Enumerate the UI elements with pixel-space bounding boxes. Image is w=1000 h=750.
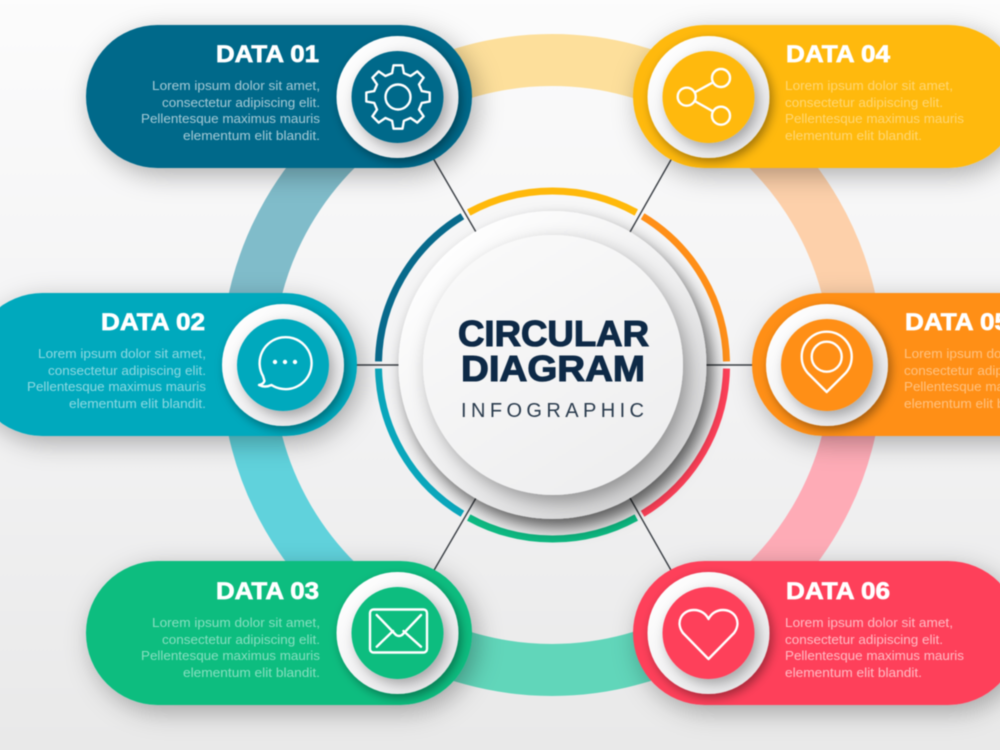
pill	[0, 293, 357, 436]
inner colored arcs	[378, 191, 726, 539]
icon circle	[648, 572, 770, 694]
body text: Lorem ipsum dolor sit amet,	[38, 346, 206, 361]
body text: consectetur adipiscing elit.	[785, 95, 943, 110]
outer disc	[398, 211, 706, 519]
pill	[86, 561, 472, 705]
pill	[752, 293, 1000, 436]
center disc	[398, 211, 706, 519]
icon circle	[648, 36, 770, 158]
panel: data 05	[752, 293, 1000, 436]
body text: elementum elit blandit.	[69, 396, 206, 411]
panel: data 01	[86, 25, 472, 168]
body text: elementum elit blandit.	[785, 665, 922, 680]
heading: DATA 06	[786, 578, 890, 605]
inner disc	[423, 235, 683, 495]
body text: Pellentesque maximus mauris	[785, 111, 965, 126]
heading: DATA 01	[216, 41, 319, 68]
body text: Pellentesque maximus mauris	[141, 648, 321, 663]
title: CIRCULAR	[458, 313, 649, 354]
body text	[904, 346, 1000, 411]
heading: DATA 05	[905, 309, 1000, 336]
icon circle	[336, 36, 458, 158]
arc: orange	[643, 216, 726, 361]
panel: data 03	[86, 561, 472, 705]
arc: red	[643, 369, 726, 514]
body text: elementum elit blandit.	[785, 128, 922, 143]
subtitle: INFOGRAPHIC	[461, 400, 644, 422]
ring segment: upper right	[704, 101, 857, 365]
arc: teal	[378, 369, 462, 514]
icon: share	[678, 69, 730, 125]
body text: consectetur adipiscing elit.	[785, 632, 943, 647]
panel: data 02	[0, 293, 357, 436]
icon: gear	[366, 65, 430, 129]
pill	[633, 561, 1000, 705]
body text: elementum elit blandit.	[183, 128, 320, 143]
heading: DATA 04	[786, 41, 891, 68]
body text: Lorem ipsum dolor sit amet,	[785, 78, 953, 93]
body text: consectetur adipiscing elit.	[162, 632, 320, 647]
icon circle	[222, 304, 344, 426]
icon: map pin	[802, 332, 852, 392]
arc: dark blue	[378, 216, 462, 361]
body text	[141, 615, 321, 680]
title	[458, 313, 649, 389]
heading: DATA 02	[101, 309, 205, 336]
ring segment: lower left	[247, 365, 400, 629]
arc: yellow	[469, 191, 636, 212]
icon circle	[766, 304, 888, 426]
body text: consectetur adipiscing elit.	[48, 363, 206, 378]
icon: chat bubble	[259, 337, 312, 389]
body text: elementum elit blandit.	[183, 665, 320, 680]
ring segment: bottom	[400, 629, 704, 670]
arc: green	[469, 518, 636, 539]
body text: Pellentesque maximus mauris	[785, 648, 965, 663]
pill	[633, 25, 1000, 168]
body text: Lorem ipsum dolor sit amet,	[152, 615, 320, 630]
heading: DATA 03	[216, 578, 319, 605]
icon circle	[336, 572, 458, 694]
pill	[86, 25, 472, 168]
panel: data 04	[633, 25, 1000, 168]
body text: Pellentesque maximus mauris	[141, 111, 321, 126]
ring segment: upper left	[247, 101, 400, 365]
icon: envelope	[370, 610, 427, 652]
ring segment: lower right	[704, 365, 857, 629]
body text: Lorem ipsum dolor sit amet,	[785, 615, 953, 630]
body text: Pellentesque maximus mauris	[27, 379, 207, 394]
panel: data 06	[633, 561, 1000, 705]
body text	[785, 615, 965, 680]
outer ring	[247, 60, 857, 670]
ring segment: top	[400, 60, 704, 101]
title: DIAGRAM	[461, 348, 645, 389]
body text: Lorem ipsum dolor sit amet,	[152, 78, 320, 93]
body text	[27, 346, 207, 411]
body text	[141, 78, 321, 143]
connector lines	[350, 158, 760, 572]
body text: consectetur adipiscing elit.	[162, 95, 320, 110]
icon: heart	[680, 610, 737, 659]
body text	[785, 78, 965, 143]
